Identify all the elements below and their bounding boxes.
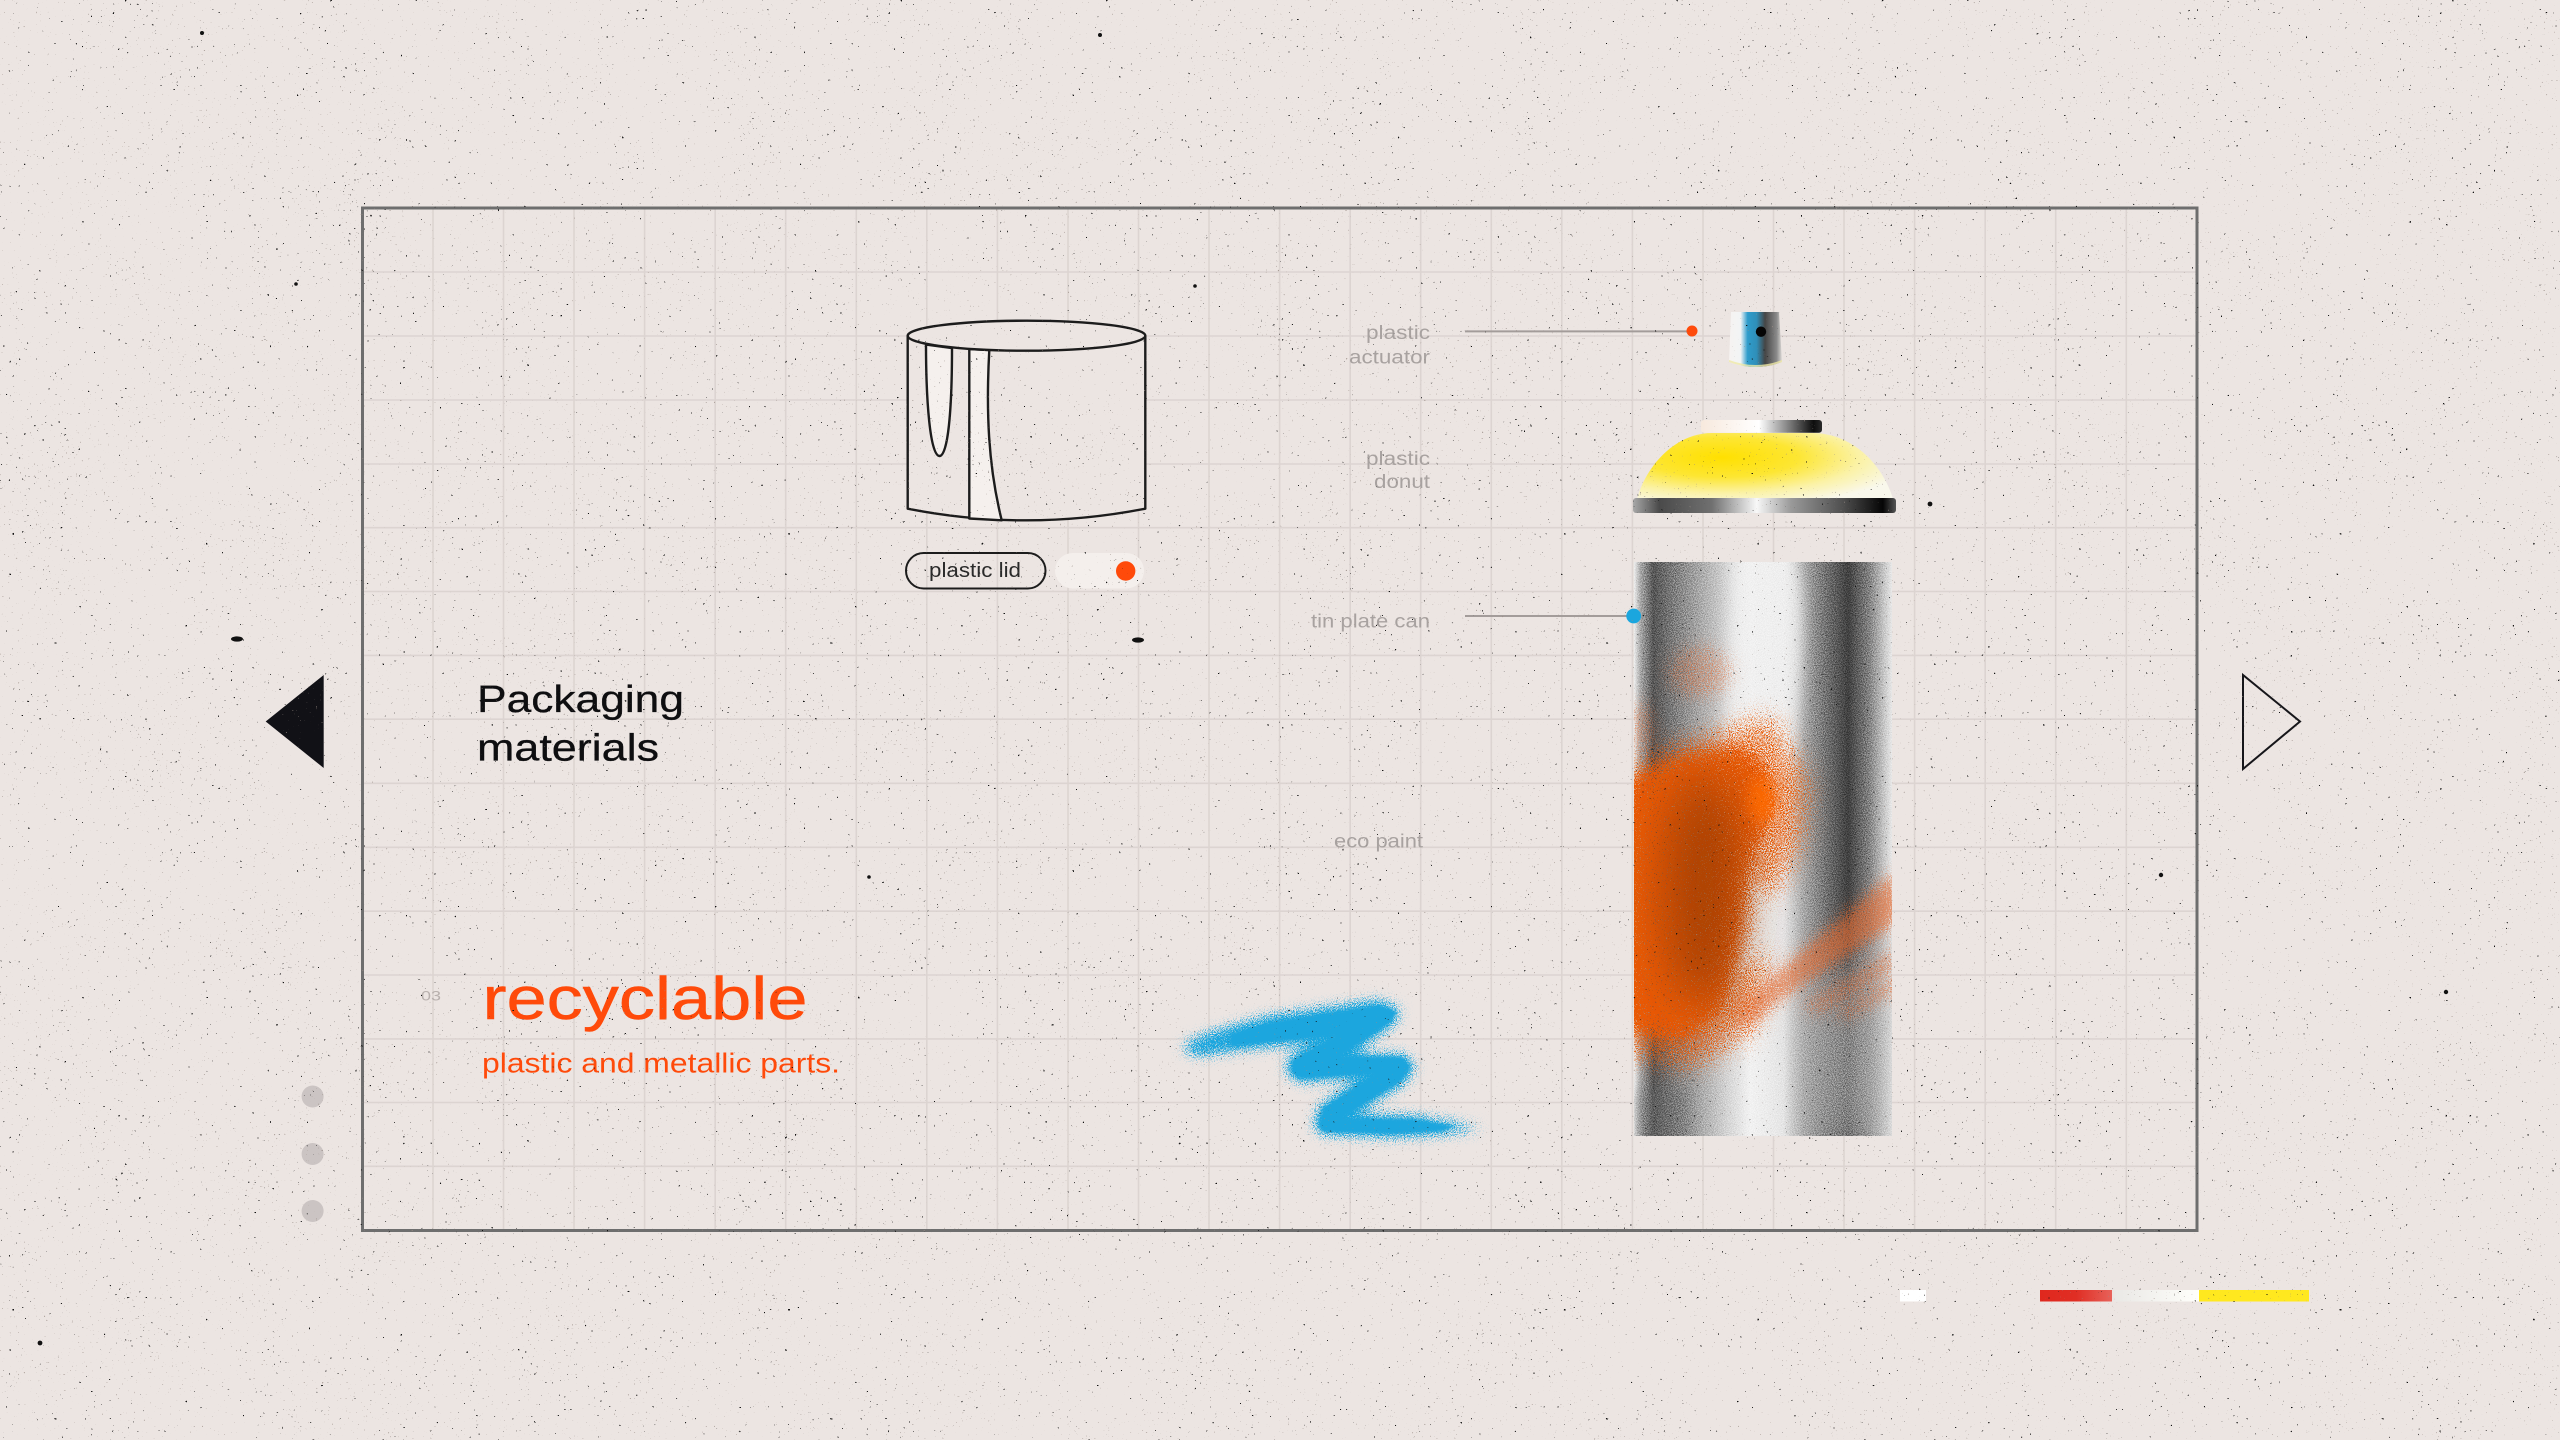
leader line: actuator <box>1465 326 1698 336</box>
orange streaks <box>1624 644 1900 1028</box>
icon: plastic lid outline <box>908 321 1145 520</box>
can surface specks <box>1634 562 1892 902</box>
colour bars <box>1900 1290 2309 1302</box>
label: plastic actuator: actuator <box>1349 348 1431 369</box>
arrow: next (outlined triangle) <box>2243 675 2300 769</box>
blue paint scribble <box>1180 1000 1484 1137</box>
label: plastic actuator <box>1349 323 1431 369</box>
label: plastic actuator: plastic <box>1366 323 1430 344</box>
leader line: tin plate can <box>1465 609 1641 623</box>
headline: recyclable: recyclable <box>482 965 808 1032</box>
slide number: 03 <box>421 988 441 1004</box>
orange paint splash <box>1600 715 1810 1068</box>
heading: Packaging materials: materials <box>477 728 659 770</box>
label: plastic donut: donut <box>1374 472 1431 493</box>
toggle switch <box>1055 553 1144 588</box>
can grain <box>1634 562 1892 1136</box>
icon: spray actuator <box>1729 312 1782 367</box>
subheading: plastic and metallic parts: plastic and metallic parts. <box>482 1048 840 1078</box>
label: eco paint: eco paint <box>1334 832 1424 852</box>
can highlight and shading <box>1634 540 1900 1150</box>
icon: spray cap dome <box>1633 420 1896 513</box>
label: plastic donut <box>1366 449 1431 493</box>
label: plastic donut: plastic <box>1366 449 1430 470</box>
label pill: plastic lid <box>906 553 1046 588</box>
heading: Packaging materials <box>477 679 684 770</box>
label: tin plate can: tin plate can <box>1311 612 1430 632</box>
panel: grid frame <box>362 208 2197 1230</box>
heading: Packaging materials: Packaging <box>477 679 684 721</box>
pagination dots <box>302 1086 324 1222</box>
arrow: previous (filled triangle) <box>266 675 324 768</box>
can metal gradient <box>1634 562 1892 1136</box>
can body <box>1634 562 1892 1136</box>
label pill: plastic lid: plastic lid <box>929 560 1021 582</box>
